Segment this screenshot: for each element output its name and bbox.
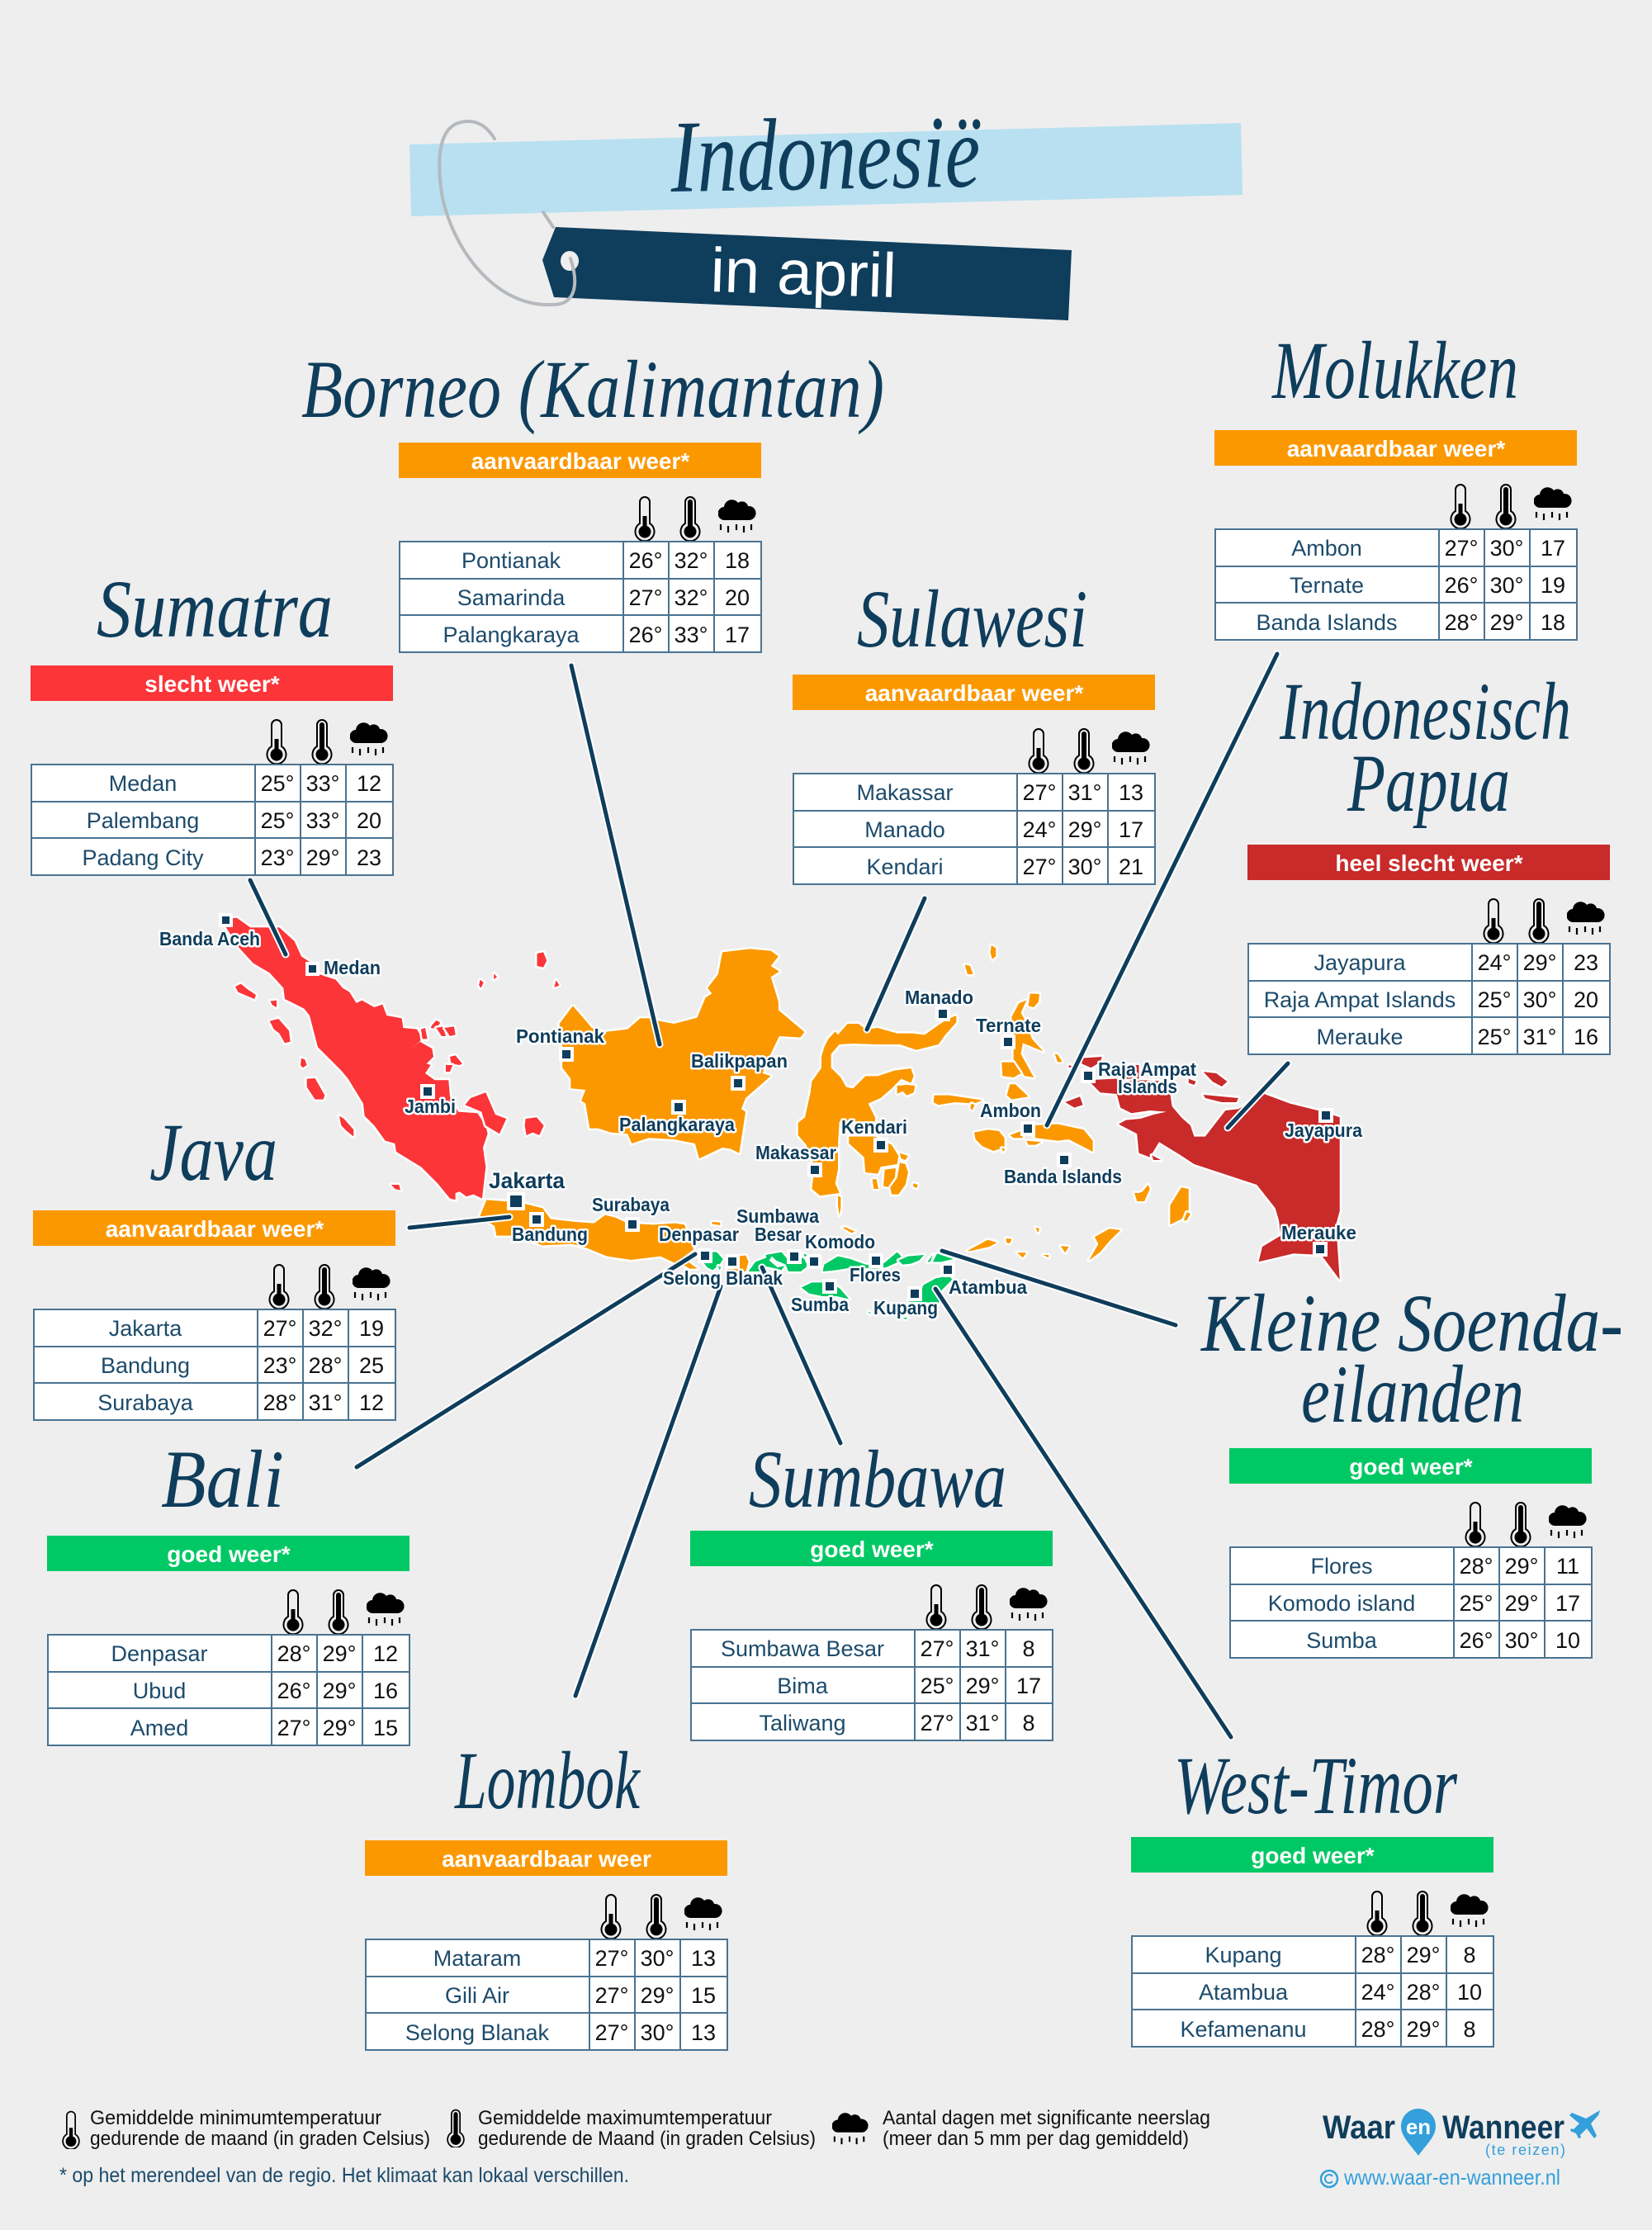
table: 29° [1068,817,1101,842]
rating badge [1229,1448,1592,1484]
rating badge [365,1840,727,1876]
table: 29° [1505,1554,1538,1579]
icon: rain [684,1897,722,1930]
city labels: Balikpapan [691,1050,788,1072]
table: 26° [1445,573,1478,598]
table: Taliwang [759,1711,846,1735]
table [1230,1547,1592,1658]
panel: Sulawesi [793,573,1155,884]
city labels: Jayapura [1285,1120,1362,1141]
icon: minimum temperature [1029,729,1048,773]
table: 28° [1445,610,1478,635]
logo word: Wanneer: Wanneer [1442,2109,1564,2146]
table: 25° [921,1674,954,1698]
table: 23° [263,1353,296,1378]
icon: minimum temperature [1367,1891,1387,1935]
rating badge [1247,845,1610,880]
table: Manado [864,817,945,842]
table: 30° [641,2020,674,2045]
rating badge [399,443,761,478]
table: 13 [691,2020,716,2045]
table: Flores [1310,1554,1373,1579]
panel: Java [33,1106,395,1420]
table: 28° [1361,2017,1394,2042]
rating badge [33,1210,395,1246]
city labels: Surabaya [592,1194,670,1215]
icon: maximum temperature [1496,485,1516,528]
table: 24° [1023,817,1056,842]
table: Ternate [1290,573,1364,598]
rating badge: slecht weer* [144,671,280,697]
table: Makassar [856,780,954,805]
table: Jakarta [109,1316,182,1341]
heading: Sumbawa [749,1433,1006,1525]
map region: Borneo [560,949,804,1158]
icon: maximum temperature [315,1265,334,1309]
city labels: Jambi [405,1096,456,1117]
table: 11 [1556,1554,1579,1579]
heading: Bali [161,1433,284,1525]
city labels: Banda Islands [1004,1166,1122,1187]
city labels: Flores [850,1264,901,1285]
city labels: Raja Ampat [1098,1058,1196,1080]
legend text: maximum temperature: Gemiddelde maximumtemperatuur [478,2107,772,2129]
table: 8 [1022,1636,1035,1661]
table: 21 [1119,855,1143,879]
legend [59,2107,1210,2187]
table: 25 [359,1353,384,1378]
table: 28° [277,1641,310,1666]
title: Indonesië: Indonesië [669,95,982,215]
city labels: Sumbawa [736,1205,819,1227]
title block [409,95,1243,320]
table: 25° [1478,987,1511,1012]
table: Komodo island [1268,1591,1415,1616]
table: 32° [675,548,708,573]
legend text: rain: (meer dan 5 mm per dag gemiddeld) [883,2128,1189,2150]
city labels: Atambua [949,1276,1027,1298]
icon: maximum temperature [1529,899,1549,943]
table: Mataram [433,1946,521,1971]
table: 32° [309,1316,342,1341]
icon: maximum temperature [1075,729,1093,773]
icon: rain [1450,1894,1489,1927]
legend text: minimum temperature: Gemiddelde minimumtemperatuur [90,2107,381,2129]
rating badge [47,1536,409,1571]
table: 29° [1523,950,1556,975]
table: Merauke [1316,1025,1403,1049]
table: 17 [1119,817,1143,842]
city labels: Sumba [791,1294,849,1315]
table: 27° [921,1636,954,1661]
table: 10 [1555,1628,1580,1653]
table: Palangkaraya [443,623,580,647]
table: Kendari [866,855,944,879]
table: 8 [1463,1943,1476,1967]
tagline: (te reizen) [1485,2142,1565,2158]
table: 12 [357,771,381,796]
map region: Papua [1065,1057,1340,1280]
legend icon: rain [832,2113,869,2144]
panel: Sumatra [31,563,393,875]
tag string [439,121,575,305]
table: 27° [921,1711,954,1735]
table: Atambua [1199,1980,1289,2005]
heading: Sulawesi [857,573,1087,665]
icon: minimum temperature [926,1585,946,1629]
map region: Sumatra [225,918,544,1200]
icon: rain [1533,487,1572,520]
legend text: maximum temperature [478,2107,816,2150]
icon: maximum temperature [680,497,700,541]
table: 27° [1445,536,1478,561]
table: 29° [323,1641,356,1666]
legend text: minimum temperature: gedurende de maand (in graden Celsius) [90,2128,430,2150]
table: 28° [1407,1980,1440,2005]
heading: Molukken [1271,324,1518,416]
table: 12 [359,1390,384,1415]
table: 32° [675,585,708,610]
table: 24° [1478,950,1511,975]
table: 15 [691,1983,716,2008]
city labels: Denpasar [659,1224,739,1245]
table: 29° [641,1983,674,2008]
table: Gili Air [445,1983,509,2008]
icon: rain [1111,731,1150,765]
rating badge [793,675,1155,710]
table: Bima [777,1674,829,1698]
city markers [220,915,1332,1300]
table: 29° [966,1674,999,1698]
icon: minimum temperature [1484,899,1503,943]
map region: Lesser Sunda Islands [702,1252,954,1319]
table: 27° [1023,780,1056,805]
table: 17 [1555,1591,1580,1616]
map region: Borneo northern islands [479,952,560,988]
table: 20 [357,808,381,833]
table: Surabaya [97,1390,194,1415]
table: 25° [261,808,294,833]
table: 17 [1541,536,1565,561]
table: 26° [629,548,662,573]
city labels: Ternate [976,1015,1041,1036]
table: 16 [373,1678,398,1703]
table [31,765,393,875]
table: Bandung [101,1353,190,1378]
table: 19 [359,1316,384,1341]
leader lines [250,654,1288,1737]
rating badge: aanvaardbaar weer* [471,448,689,474]
panel: Sumbawa [690,1433,1053,1740]
city labels: Islands [1118,1076,1177,1097]
heading: eilanden [1301,1348,1524,1440]
icon: minimum temperature [1466,1503,1484,1546]
table: Denpasar [111,1641,208,1666]
table: 27° [263,1316,296,1341]
table: 29° [1407,2017,1440,2042]
icon: minimum temperature [269,1265,289,1309]
footnote: * op het merendeel van de regio. Het klimaat kan lokaal verschillen. [59,2164,629,2187]
map of Indonesia [225,918,1340,1319]
table: 29° [1490,610,1523,635]
icon: rain [1566,902,1605,935]
legend text: rain: Aantal dagen met significante neerslag [883,2107,1210,2129]
icon: rain [1548,1505,1587,1538]
table: Kefamenanu [1180,2017,1307,2042]
table: 30° [1490,573,1523,598]
heading: Borneo (Kalimantan) [301,343,884,435]
panel: Borneo [301,343,884,652]
rating badge [690,1531,1053,1566]
table: 17 [1016,1674,1041,1698]
icon: maximum temperature [1413,1891,1432,1935]
icon: rain [352,1267,391,1300]
icon: rain [717,500,756,533]
city labels: Selong Blanak [663,1267,783,1289]
city labels: Palangkaraya [619,1114,735,1135]
city labels: Manado [905,987,973,1008]
table: 26° [1460,1628,1493,1653]
table: Raja Ampat Islands [1264,987,1456,1012]
subtitle tag [542,227,1072,320]
city labels: Jakarta [489,1168,566,1193]
table: Padang City [82,845,204,870]
table: 23° [261,845,294,870]
rating badge [31,665,393,701]
heading [1279,665,1571,829]
icon: maximum temperature [312,720,332,764]
rating badge: goed weer* [1251,1843,1375,1868]
table: 25° [1478,1025,1511,1049]
panel: West-Timor [1131,1740,1493,2047]
table: 20 [725,585,750,610]
table: Jayapura [1314,950,1407,975]
table: Medan [109,771,177,796]
heading [1200,1277,1623,1440]
city labels: Merauke [1281,1222,1356,1243]
panel: Lombok [365,1735,727,2050]
city labels: Ambon [980,1100,1041,1121]
rating badge: goed weer* [167,1541,291,1567]
table: 30° [1505,1628,1538,1653]
heading: West-Timor [1174,1740,1458,1831]
table: Sumba [1306,1628,1378,1653]
title ribbon [409,123,1243,216]
panel: Indonesisch Papua [1247,665,1610,1054]
table: 26° [629,623,662,647]
table: 13 [1119,780,1143,805]
rating badge: aanvaardbaar weer* [865,680,1083,706]
heading: Lombok [454,1735,641,1826]
city labels: Banda Aceh [159,928,260,949]
rating badge: goed weer* [1349,1454,1473,1480]
table: 25° [1460,1591,1493,1616]
rating badge [1131,1837,1493,1873]
table [691,1630,1053,1740]
tag hole [561,251,579,271]
table: Sumbawa Besar [721,1636,884,1661]
table: 30° [641,1946,674,1971]
legend icon: minimum temperature [63,2112,79,2149]
table: 13 [691,1946,716,1971]
table: 28° [1460,1554,1493,1579]
table: Banda Islands [1256,610,1398,635]
legend icon: maximum temperature [447,2110,464,2147]
table: 29° [1407,1943,1440,1967]
table: Kupang [1205,1943,1282,1967]
table: 33° [306,808,339,833]
rating badge: aanvaardbaar weer* [106,1216,324,1242]
city labels: Medan [324,957,381,978]
city labels: Komodo [805,1231,875,1252]
table: Pontianak [462,548,561,573]
rating badge: aanvaardbaar weer [442,1846,651,1872]
heading: Papua [1347,737,1510,829]
table: 28° [309,1353,342,1378]
table: 18 [725,548,750,573]
map region: Moluccas [842,945,1190,1261]
table: Samarinda [457,585,566,610]
table: 27° [1023,855,1056,879]
table: Ambon [1291,536,1362,561]
icon: minimum temperature [601,1895,621,1939]
icon: copyright [1321,2171,1337,2187]
city labels: Kendari [841,1116,907,1138]
table: 30° [1068,855,1101,879]
rating badge: aanvaardbaar weer* [1287,436,1505,462]
table: 27° [595,1946,628,1971]
table [400,542,761,652]
legend text: rain [883,2107,1210,2150]
table: Ubud [133,1678,186,1703]
table: 30° [1523,987,1556,1012]
table: 31° [1068,780,1101,805]
table: 27° [595,1983,628,2008]
subtitle: in april: in april [709,235,897,311]
city labels [159,928,1362,1319]
table: 29° [1505,1591,1538,1616]
logo: Waar en Wanneer [1321,2109,1600,2190]
icon: minimum temperature [1451,485,1470,528]
icon: maximum temperature [329,1590,348,1634]
table: 8 [1463,2017,1476,2042]
table: 27° [277,1716,310,1740]
table: 33° [306,771,339,796]
table: Amed [130,1716,188,1740]
table: 33° [675,623,708,647]
table [793,774,1155,884]
table: 31° [1523,1025,1556,1049]
map region: Sulawesi [798,1016,1006,1215]
heading: Sumatra [97,563,333,655]
legend text: minimum temperature [90,2107,430,2150]
table: 31° [966,1711,999,1735]
icon: location pin [1401,2109,1436,2156]
table [1132,1936,1493,2047]
table: 19 [1541,573,1565,598]
icon: rain [349,722,388,755]
city labels: Bandung [512,1224,588,1245]
table: 23 [1574,950,1598,975]
table: 28° [263,1390,296,1415]
table [1215,529,1577,640]
table: 29° [323,1716,356,1740]
table [366,1939,727,2050]
table: 16 [1574,1025,1598,1049]
table: 31° [966,1636,999,1661]
table: 29° [323,1678,356,1703]
city labels: Pontianak [516,1025,604,1047]
city labels: Makassar [755,1142,836,1163]
table: 8 [1022,1711,1035,1735]
table: 29° [306,845,339,870]
table: 25° [261,771,294,796]
table: 30° [1490,536,1523,561]
icon: minimum temperature [636,497,654,541]
panel: Kleine Soenda-eilanden [1200,1277,1623,1658]
table: 27° [629,585,662,610]
icon: rain [1009,1588,1048,1621]
rating badge: goed weer* [810,1536,934,1562]
table: 20 [1574,987,1598,1012]
city labels: Kupang [873,1297,938,1319]
table: 18 [1541,610,1565,635]
table: 24° [1361,1980,1394,2005]
rating badge [1214,430,1577,466]
table: 28° [1361,1943,1394,1967]
table: 27° [595,2020,628,2045]
table [1248,944,1610,1054]
panel: Bali [47,1433,409,1745]
table: 31° [309,1390,342,1415]
table: 12 [373,1641,398,1666]
icon: maximum temperature [1511,1503,1531,1546]
icon: minimum temperature [284,1590,302,1634]
website url: www.waar-en-wanneer.nl [1343,2165,1560,2190]
city labels: Besar [755,1224,802,1245]
heading: Java [149,1106,277,1198]
logo word: Waar: Waar [1323,2109,1395,2146]
icon: location pin: en [1406,2114,1431,2139]
table: 10 [1457,1980,1482,2005]
icon: minimum temperature [267,720,286,764]
table: Selong Blanak [405,2020,550,2045]
map region: Java [480,1200,720,1269]
table: 15 [373,1716,398,1740]
table: Palembang [87,808,199,833]
table: 17 [725,623,750,647]
icon: plane [1569,2110,1600,2138]
legend text: maximum temperature: gedurende de Maand (in graden Celsius) [478,2128,816,2150]
table: 26° [277,1678,310,1703]
icon: maximum temperature [647,1895,665,1939]
icon: rain [366,1593,405,1626]
table [34,1309,395,1420]
panel: Molukken [1214,324,1577,640]
rating badge: heel slecht weer* [1335,850,1523,876]
table [48,1635,409,1745]
icon: maximum temperature [973,1585,991,1629]
table: 23 [357,845,381,870]
